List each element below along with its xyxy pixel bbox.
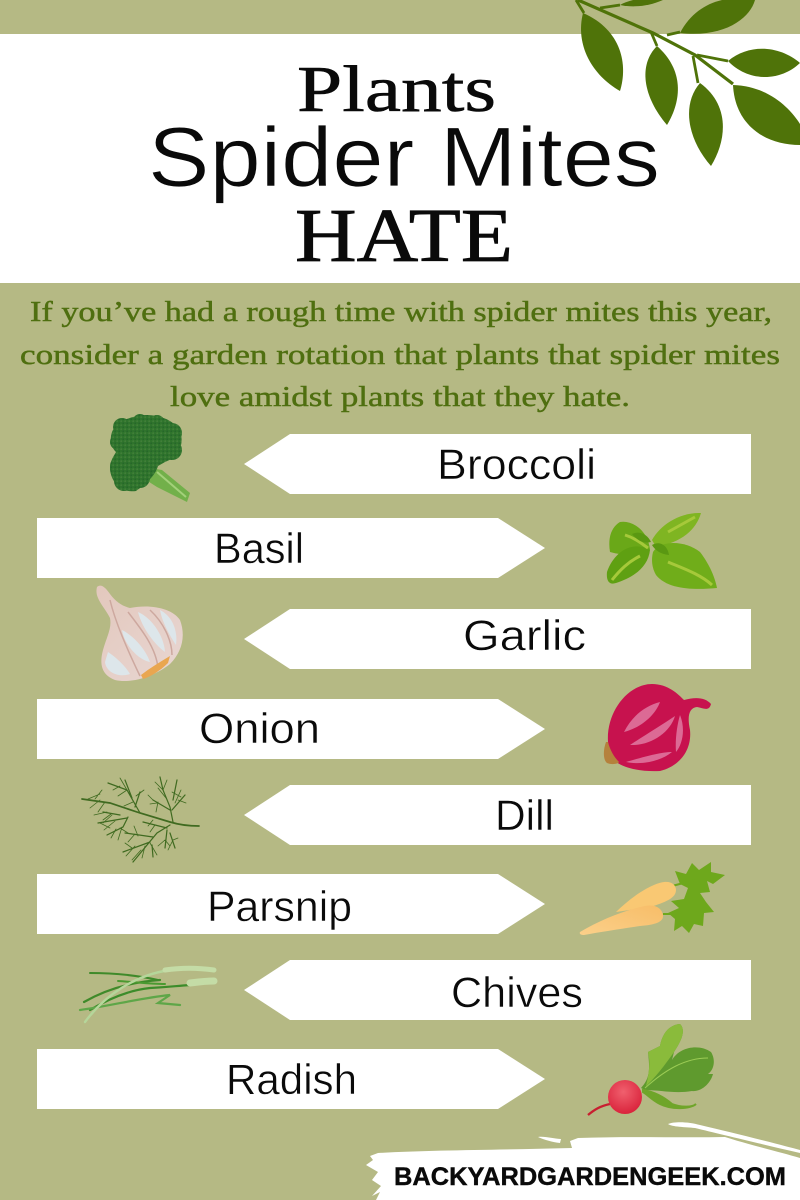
row: dill (82, 777, 751, 862)
arrow: onion (37, 699, 545, 759)
icon: basil (607, 513, 717, 589)
label: radish: Radish (226, 1056, 357, 1104)
row: onion (37, 684, 711, 771)
label: dill: Dill (495, 792, 554, 840)
title: Plants (297, 53, 496, 126)
row: basil (37, 513, 717, 589)
icon: garlic (96, 586, 183, 681)
icon: radish (588, 1024, 714, 1115)
intro text: If you’ve had a rough time with spider mites this year, (30, 296, 772, 328)
icon: broccoli (110, 414, 190, 502)
arrow: broccoli (244, 434, 751, 494)
intro text: consider a garden rotation that plants that spider mites (20, 339, 780, 371)
label: onion: Onion (199, 705, 320, 753)
title: HATE (295, 194, 513, 278)
footer brush stroke (366, 1122, 800, 1200)
row: parsnip (37, 862, 725, 935)
label: chives: Chives (451, 969, 583, 1017)
icon: onion (604, 684, 711, 771)
arrow: garlic (244, 609, 751, 669)
footer website text: BACKYARDGARDENGEEK.COM (394, 1163, 786, 1191)
arrow: radish (37, 1049, 545, 1109)
icon: chives (80, 968, 214, 1022)
arrow: parsnip (37, 874, 545, 934)
row: chives (80, 960, 751, 1022)
row: broccoli (110, 414, 751, 502)
title (148, 53, 660, 278)
label: parsnip: Parsnip (207, 883, 352, 931)
title: Spider Mites (148, 110, 660, 204)
arrow: chives (244, 960, 751, 1020)
intro text (20, 296, 780, 413)
header panel (0, 34, 800, 283)
label: garlic: Garlic (463, 612, 586, 660)
row: garlic (96, 586, 751, 681)
row: radish (37, 1024, 714, 1115)
icon: leafy branch (576, 0, 800, 166)
icon: parsnip (580, 862, 725, 935)
intro text: love amidst plants that they hate. (170, 381, 630, 413)
icon: dill (82, 777, 199, 862)
arrow: dill (244, 785, 751, 845)
label: basil: Basil (214, 525, 304, 573)
arrow: basil (37, 518, 545, 578)
label: broccoli: Broccoli (437, 441, 596, 489)
